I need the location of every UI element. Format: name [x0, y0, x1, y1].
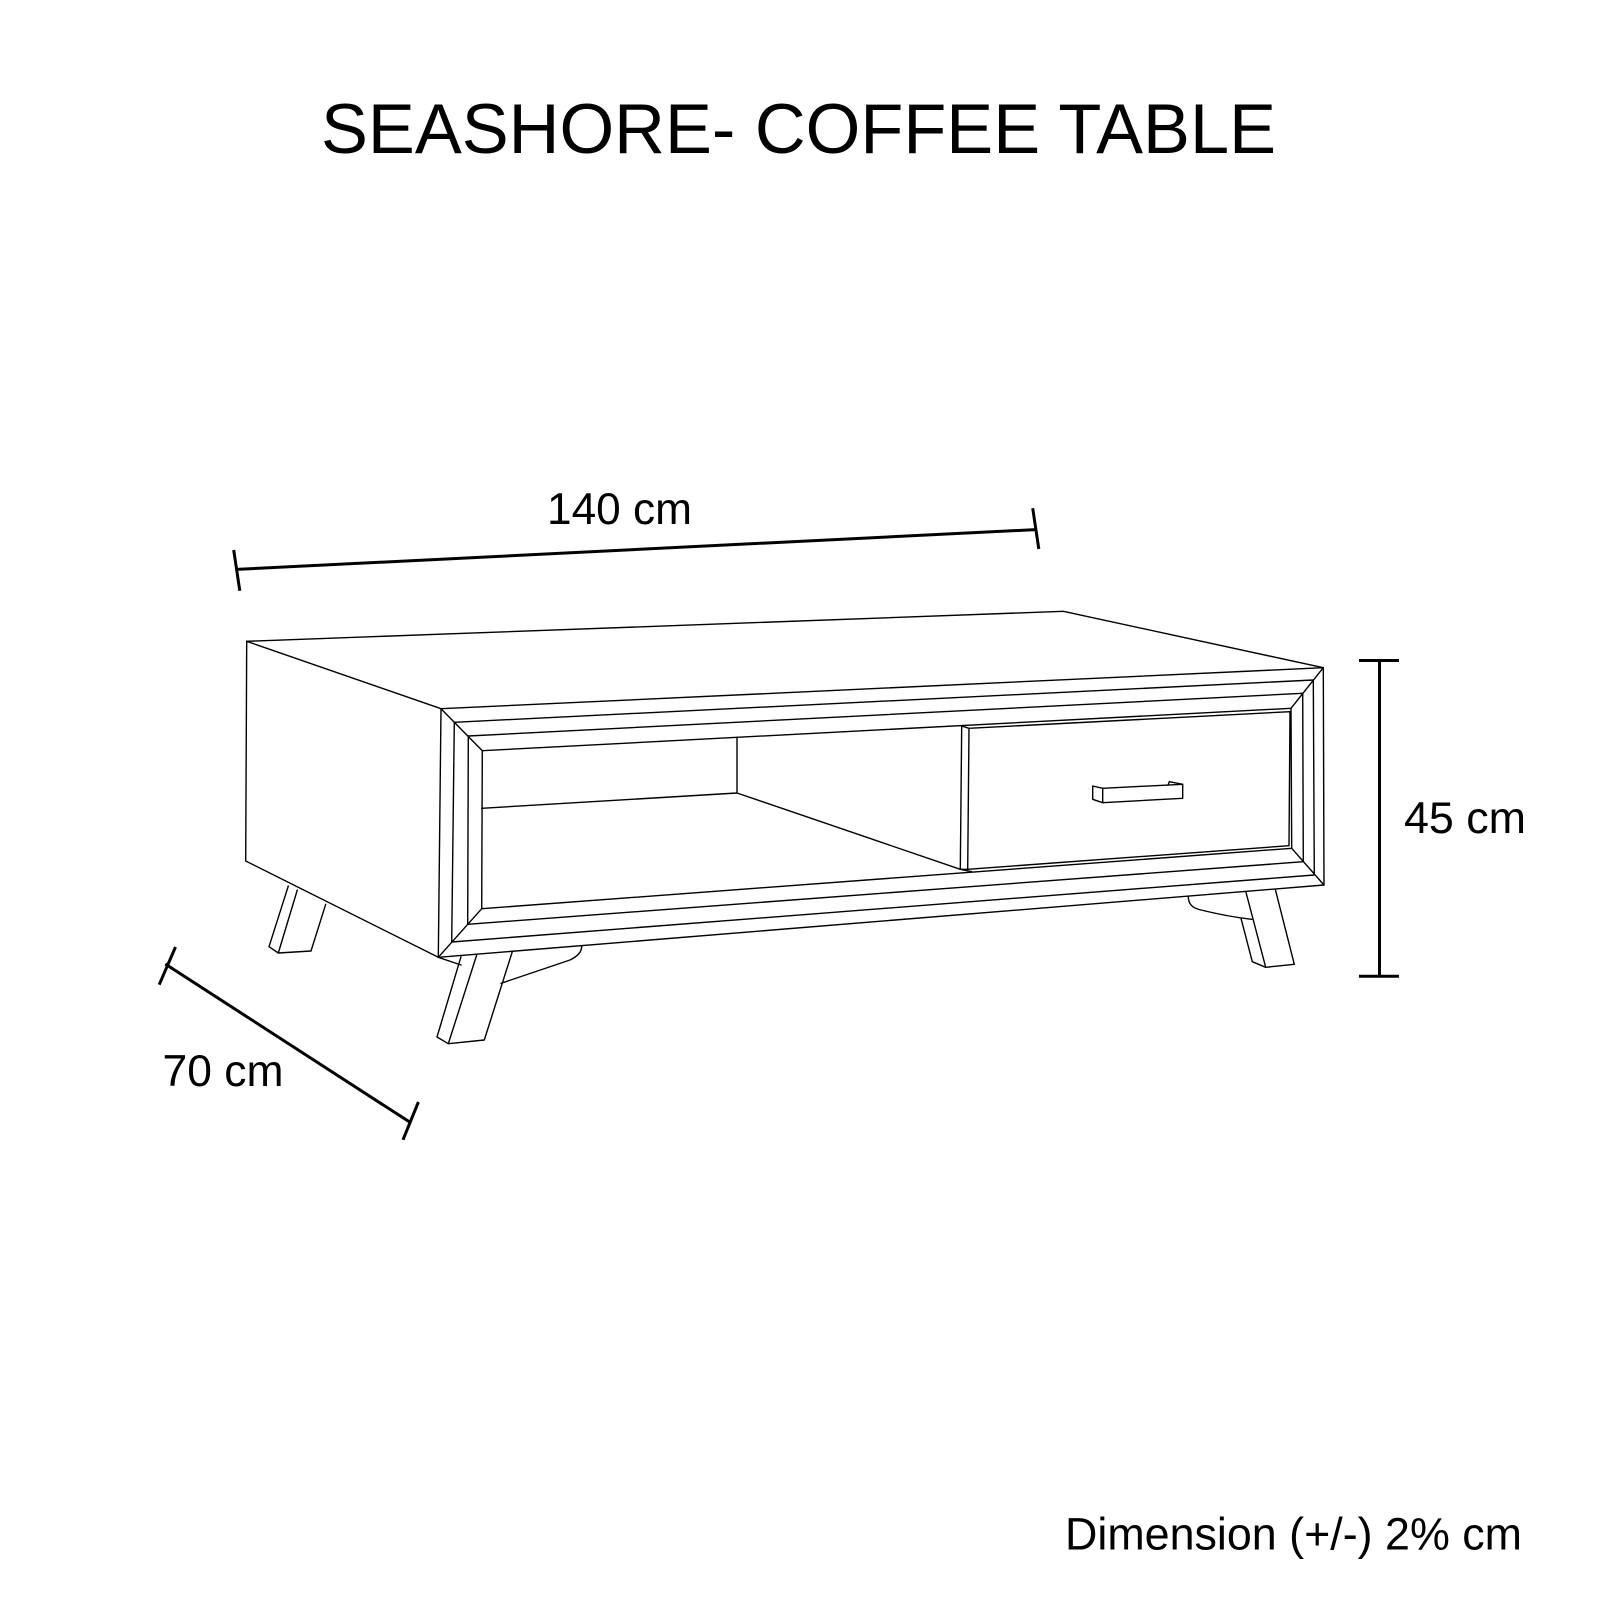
drawer handle	[1093, 782, 1183, 803]
tolerance note: Dimension (+/-) 2% cm	[1065, 1508, 1522, 1560]
front left leg	[437, 946, 582, 1044]
dimension: width 140 cm	[234, 485, 1039, 591]
dimension: depth 70 cm	[159, 947, 418, 1140]
title: SEASHORE- COFFEE TABLE	[321, 89, 1276, 168]
back left leg	[269, 886, 326, 953]
front right leg	[1188, 889, 1294, 967]
open shelf	[482, 737, 960, 869]
front frame	[438, 668, 1324, 957]
dimension: depth 70 cm: 70 cm	[162, 1047, 284, 1096]
table top and left side	[246, 611, 1323, 957]
dimension: height 45 cm: 45 cm	[1404, 794, 1526, 843]
drawer	[960, 712, 1290, 872]
coffee table line drawing	[246, 611, 1324, 1044]
dimension: width 140 cm: 140 cm	[547, 485, 692, 534]
